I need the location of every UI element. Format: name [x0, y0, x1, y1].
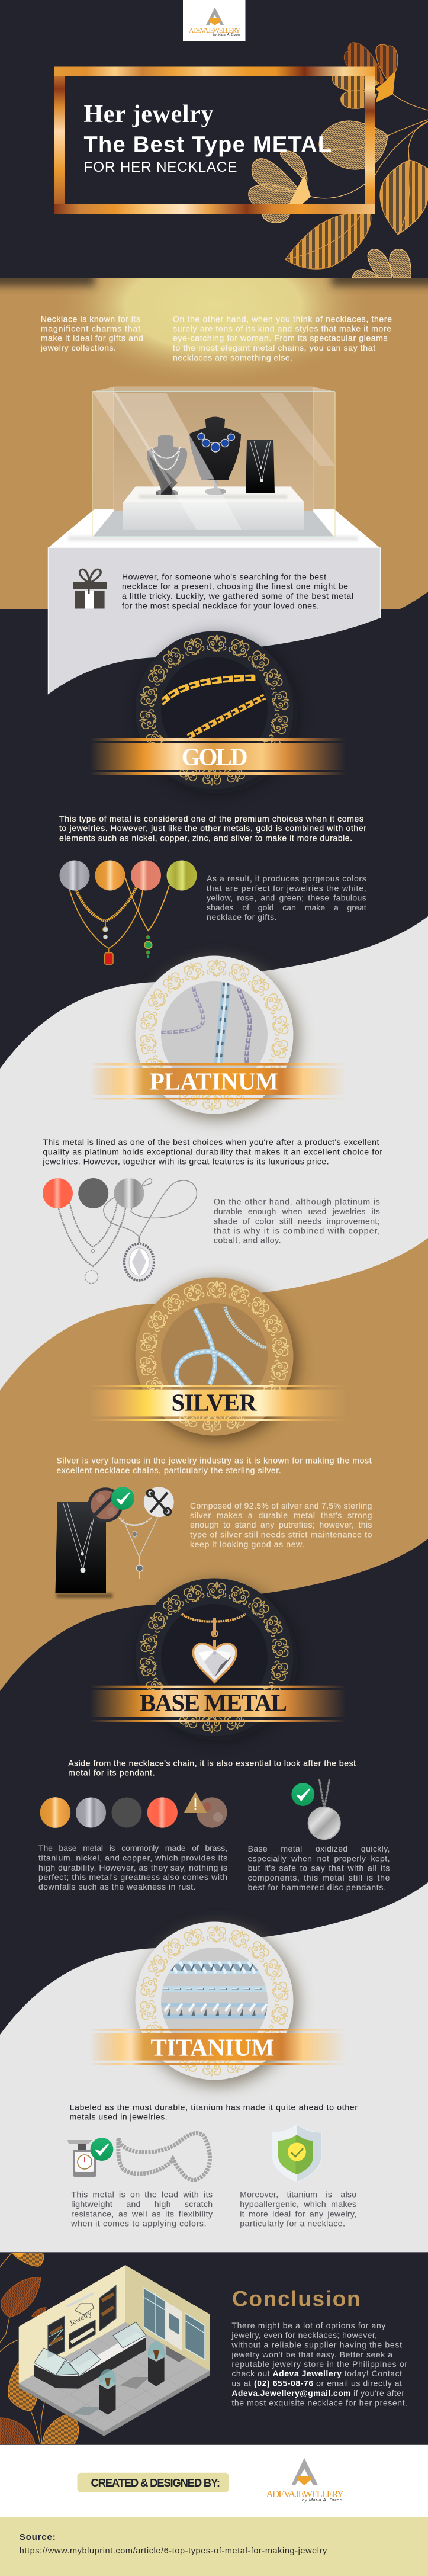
text: base metal right: but it's safe to say that with all its — [248, 1863, 390, 1873]
label: created and designed by: CREATED & DESIGNED BY: — [91, 2476, 220, 2489]
stand: silver necklace — [246, 440, 275, 493]
panel: titanium — [0, 1882, 428, 2253]
logo: Adeva Jewellery — [183, 0, 245, 41]
logo: Adeva Jewellery: by Maria A. Dizon — [302, 2497, 342, 2503]
panel: base metal — [0, 1539, 428, 2035]
text: titanium left: This metal is on the lead with its — [71, 2190, 213, 2199]
text: conclusion: There might be a lot of options for any — [231, 2321, 385, 2330]
text: titanium right — [240, 2190, 356, 2228]
intro text: right: to the most elegant metal chains, you can say that — [173, 343, 375, 352]
decoration: copper leaves — [0, 2253, 79, 2444]
logo: Adeva Jewellery: ADEVA JEWELLERY — [189, 27, 241, 34]
text: gold colours: shades of gold can make a great — [207, 903, 366, 912]
text: gold colours — [207, 874, 366, 922]
banner: TITANIUM — [90, 2029, 346, 2065]
text: base metal intro: Aside from the necklace's chain, it is also essential to look after the best — [68, 1758, 356, 1767]
text: base metal left: downfalls such as the weakness in rust. — [38, 1882, 196, 1891]
necklaces: gold — [70, 878, 169, 964]
logo: Adeva Jewellery: ADEVA JEWELLERY — [266, 2488, 344, 2500]
intro text: right — [173, 314, 392, 362]
text: titanium right: hypoallergenic, which makes — [240, 2199, 356, 2209]
text: conclusion — [231, 2321, 407, 2407]
text: platinum alloys — [214, 1197, 380, 1245]
text: silver intro — [56, 1456, 372, 1475]
pendant: hammered disc — [308, 1779, 340, 1839]
text: conclusion: without a reliable supplier having the best — [231, 2340, 402, 2350]
text: platinum intro: jewelries. However, together with its great features is its luxurious price. — [42, 1157, 329, 1166]
necklace: titanium — [118, 2134, 210, 2180]
text: gold intro: This type of metal is considered one of the premium choices when it comes — [59, 814, 363, 823]
title — [84, 101, 332, 175]
text: titanium left: lightweight and high scratch — [71, 2199, 213, 2209]
intro text: right: eye-catching for women. From its spectacular gleams — [173, 333, 387, 343]
panel: intro — [0, 278, 428, 695]
icon: warning — [185, 1793, 206, 1812]
medallion: silver chains — [135, 1277, 297, 1441]
text: conclusion: jewelry won't be that easy. Better seek a — [231, 2350, 392, 2359]
medallion: heart pendant — [135, 1578, 297, 1740]
swatches: base metals — [40, 1797, 227, 1828]
icon: check — [111, 1487, 134, 1510]
text: base metal right: especially when not properly kept, — [248, 1854, 390, 1863]
text: base metal right — [248, 1844, 390, 1892]
logo: Adeva Jewellery: by Maria A. Dizon — [213, 33, 240, 37]
text: conclusion: Adeva.Jewellery@gmail.com if you're after — [231, 2388, 404, 2398]
medallion: platinum chains — [135, 956, 297, 1119]
medallion: gold chains — [135, 631, 297, 793]
intro text: gift note: for the most special necklace for your loved ones. — [122, 601, 319, 610]
shop sign — [67, 2293, 94, 2328]
intro text: gift note: a little tricky. Luckily, we gathered some of the best metal — [122, 591, 353, 601]
wall shelves — [48, 2286, 116, 2360]
text: silver composition: silver makes a durable metal that's strong — [190, 1510, 372, 1520]
text: platinum alloys: cobalt, and alloy. — [214, 1236, 281, 1245]
intro text: left: magnificent charms that — [41, 324, 140, 333]
pedestal — [48, 509, 380, 773]
text: gold intro: to jewelries. However, just like the other metals, gold is combined with other — [59, 823, 366, 833]
icon: tools — [144, 1487, 174, 1517]
illustration: jewelry shop — [19, 2265, 210, 2436]
banner: BASE METAL — [90, 1686, 346, 1722]
bust: blue stones — [189, 417, 241, 495]
panel: hero — [54, 0, 428, 278]
text: gold colours: yellow, rose, and green; these fabulous — [207, 893, 366, 903]
text: base metal right: best for hammered disc pendants. — [248, 1882, 386, 1892]
text: platinum alloys: shade of color still needs improvement; — [214, 1216, 380, 1226]
text: platinum alloys: On the other hand, although platinum is — [214, 1197, 380, 1207]
panel: platinum — [0, 916, 428, 1390]
source label: Source: — [20, 2532, 56, 2542]
text: titanium intro: metals used in jewelries. — [70, 2112, 168, 2122]
logo: Adeva Jewellery — [266, 2458, 344, 2503]
label: created and designed by — [77, 2473, 229, 2492]
shop sign: Jewelry — [67, 2308, 94, 2328]
icon: shield — [272, 2124, 321, 2182]
intro text: gift note: However, for someone who's searching for the best — [122, 572, 326, 582]
text: base metal left: high durability. However, as they say, nothing is — [38, 1863, 227, 1872]
text: base metal right: Base metal oxidized quickly, — [248, 1844, 390, 1853]
counter — [34, 2322, 146, 2389]
text: titanium left: resistance, as well as its flexibility — [71, 2209, 213, 2219]
title: The Best Type METAL — [84, 132, 332, 157]
banner: SILVER — [90, 1385, 346, 1421]
gold frame — [54, 66, 375, 214]
text: titanium right: it more ideal for any jewelry, — [240, 2209, 356, 2219]
title: Her jewelry — [84, 101, 213, 128]
swatches: platinum colours — [43, 1178, 144, 1208]
swatches: gold colours — [59, 860, 197, 891]
intro text: gift note — [122, 572, 353, 610]
title: FOR HER NECKLACE — [84, 159, 237, 175]
intro text: right: surely are tons of its kind and styles that make it more — [173, 324, 391, 333]
text: base metal intro: metal for its pendant. — [68, 1767, 155, 1777]
text: titanium left: when it comes to applying colors. — [70, 2219, 206, 2228]
text: titanium intro — [70, 2103, 358, 2122]
banner: TITANIUM: TITANIUM — [150, 2033, 274, 2061]
text: conclusion: us at (02) 655-08-76 or email us directly at — [231, 2379, 402, 2388]
panel: gold — [47, 592, 428, 965]
text: gold colours: that are perfect for jewelries the white, — [207, 883, 366, 893]
text: base metal intro — [68, 1758, 356, 1777]
text: gold colours: As a result, it produces gorgeous colors — [207, 874, 366, 883]
banner: PLATINUM — [90, 1063, 346, 1099]
intro text: left: make it ideal for gifts and — [41, 333, 143, 343]
text: gold intro: elements such as nickel, copper, zinc, and silver to make it more durable. — [59, 833, 352, 842]
text: base metal left: perfect; this metal's greatness also comes with — [38, 1872, 227, 1882]
banner: PLATINUM: PLATINUM — [150, 1068, 278, 1095]
text: titanium right: particularly for a necklace. — [240, 2219, 345, 2228]
panel: silver — [0, 1238, 428, 1691]
panel: source — [0, 2517, 428, 2576]
text: platinum intro: quality as platinum holds exceptional durability that makes it an excellent choice for — [43, 1147, 382, 1157]
intro text: right: On the other hand, when you think of necklaces, there — [173, 314, 392, 323]
text: silver composition: type of silver still needs strict maintenance to — [190, 1530, 372, 1539]
text: silver intro: excellent necklace chains, particularly the sterling silver. — [56, 1465, 281, 1475]
source url: https://www.mybluprint.com/article/6-top-types-of-metal-for-making-jewelry — [20, 2546, 327, 2556]
panel: credits — [0, 2445, 428, 2517]
text: conclusion: jewelry, even for necklaces; however, — [231, 2330, 377, 2340]
necklaces: silver — [120, 1518, 157, 1579]
text: gold colours: necklace for gifts. — [207, 912, 277, 922]
text: platinum intro: This metal is lined as one of the best choices when you're after a product's excellent — [43, 1137, 379, 1147]
text: gold intro — [59, 814, 366, 842]
banner: BASE METAL: BASE METAL — [140, 1689, 287, 1717]
banner: GOLD — [90, 738, 346, 775]
bust: pearls — [147, 435, 187, 495]
intro text: left: jewelry collections. — [40, 343, 116, 352]
text: titanium right: Moreover, titanium is also — [240, 2190, 356, 2199]
text: base metal right: components, this metal still is the — [248, 1873, 390, 1882]
text: platinum alloys: that is why it is combined with copper, — [214, 1226, 380, 1236]
icon: scale — [67, 2140, 96, 2177]
text: conclusion: check out Adeva Jewellery today! Contact — [231, 2369, 402, 2378]
display case with necklaces — [92, 387, 335, 537]
text: titanium intro: Labeled as the most durable, titanium has made it quite ahead to other — [70, 2103, 358, 2112]
heading: conclusion: Conclusion — [232, 2287, 361, 2311]
illustration: necklace stand — [56, 1502, 112, 1598]
icon: check — [91, 2138, 113, 2161]
icon: check — [291, 1783, 314, 1806]
intro text: left: Necklace is known for its — [41, 314, 140, 323]
display pillars — [99, 2341, 165, 2414]
decoration: gold leaves — [249, 43, 428, 278]
text: conclusion: reputable jewelry store in the Philippines or — [231, 2359, 407, 2369]
text: silver composition — [190, 1501, 372, 1549]
banner: GOLD: GOLD — [182, 743, 248, 770]
text: silver composition: enough to stand any putrefies; however, this — [190, 1520, 372, 1529]
window and door front — [143, 2288, 205, 2360]
text: silver composition: keep it looking good as new. — [190, 1539, 304, 1549]
text: conclusion: the most exquisite necklace for her present. — [231, 2398, 407, 2407]
medallion: titanium chains — [135, 1921, 297, 2085]
text: silver composition: Composed of 92.5% of silver and 7.5% sterling — [190, 1501, 372, 1510]
intro text: gift note: necklace for a present, choosing the finest one might be — [122, 582, 348, 591]
necklaces: platinum — [59, 1179, 197, 1284]
panel: conclusion — [0, 2253, 428, 2445]
text: base metal left: titanium, nickel, and copper, which provides its — [38, 1853, 227, 1862]
icon: no rust — [89, 1489, 121, 1521]
intro text: right: necklaces are something else. — [173, 353, 292, 362]
text: platinum alloys: durable enough when used jewelries its — [214, 1207, 380, 1216]
intro text: left — [40, 314, 143, 352]
text: platinum intro — [42, 1137, 382, 1166]
banner: SILVER: SILVER — [172, 1388, 257, 1416]
text: titanium left — [70, 2190, 213, 2228]
text: base metal left — [38, 1843, 227, 1891]
icon: gift — [73, 569, 107, 609]
text: silver intro: Silver is very famous in the jewelry industry as it is known for making the most — [56, 1456, 372, 1465]
text: base metal left: The base metal is commonly made of brass, — [38, 1843, 227, 1853]
